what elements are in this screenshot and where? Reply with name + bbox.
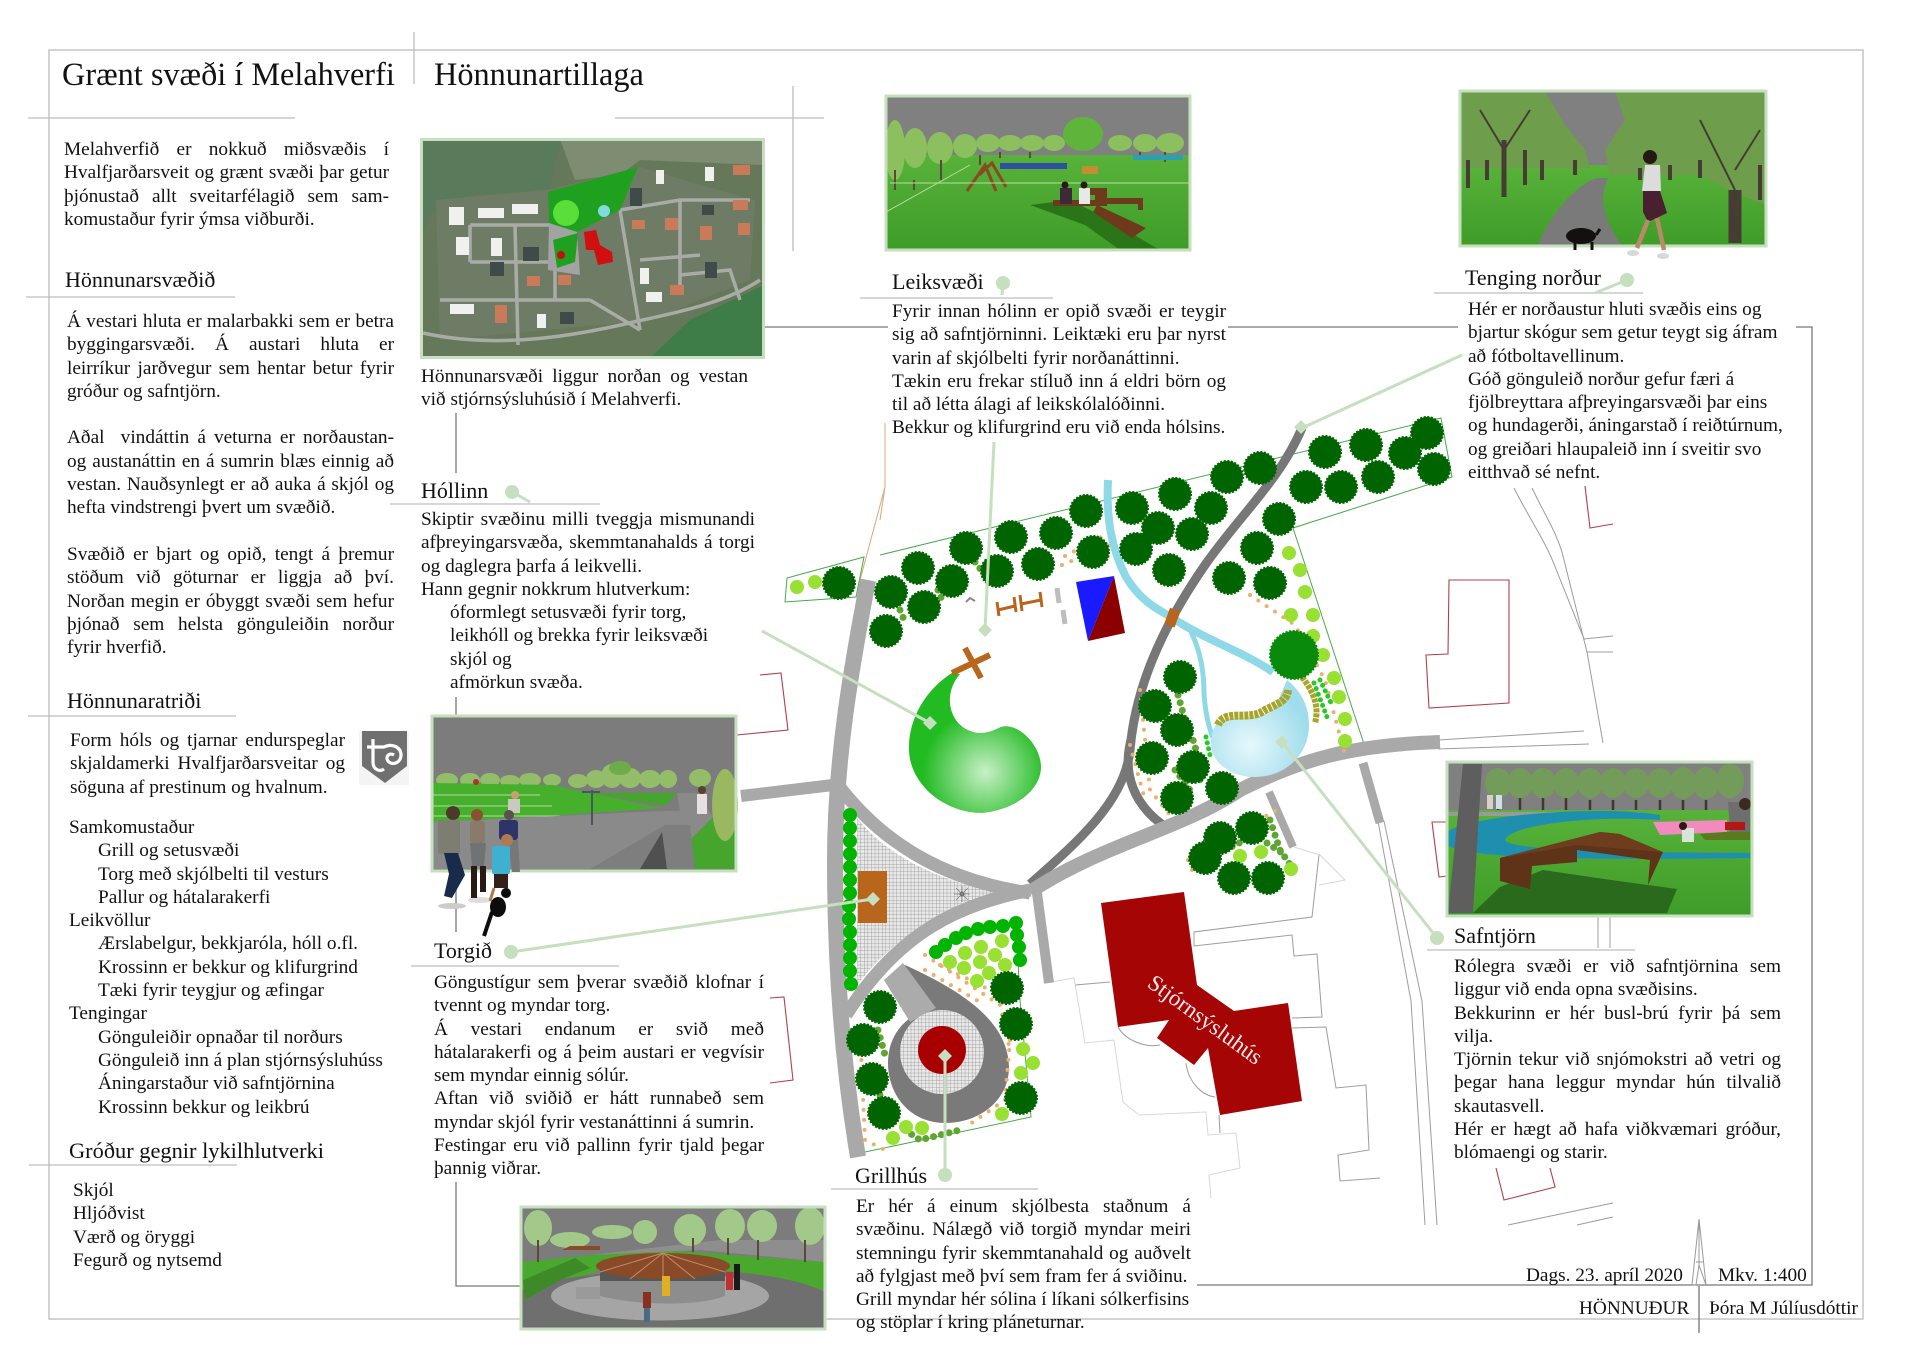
walker and dog — [1566, 150, 1669, 259]
walking paths — [1030, 428, 1302, 884]
heading: grill house: Grillhús — [855, 1163, 927, 1188]
pond — [1211, 680, 1309, 777]
text block: grill house — [856, 1196, 1191, 1333]
text block: design features: söguna af prestinum og hvalnum. — [70, 777, 328, 798]
text block: design features: skjaldamerki Hvalfjarðarsveitar og — [70, 753, 345, 774]
grey roads — [741, 580, 1440, 1157]
text block: north link: og hundagerði, áningarstað í reiðtúrnum, — [1468, 415, 1783, 436]
orange flower dots — [860, 535, 1345, 1150]
bridge — [1164, 608, 1180, 628]
people in the plaza render — [438, 779, 707, 936]
grill loop path — [885, 965, 1009, 1123]
text block: the hill: Skiptir svæðinu milli tveggja mismunandi — [421, 509, 755, 530]
hill — [909, 673, 1041, 813]
text block: pond: Rólegra svæði er við safntjörnina sem — [1454, 956, 1781, 977]
heading: north link: Tenging norður — [1465, 265, 1601, 290]
text block: grill house: að fylgjast með því sem fram fer á sviðinu. — [856, 1266, 1187, 1287]
plaza paving — [857, 818, 1005, 985]
text block: pond: Tjörnin tekur við snjómokstri að vetri og — [1454, 1049, 1781, 1070]
icon: municipal shield — [359, 731, 409, 785]
heading: play area: Leiksvæði — [892, 269, 984, 294]
aerial photo — [421, 139, 764, 358]
text block: pond: vilja. — [1454, 1026, 1493, 1047]
render: plaza view — [432, 716, 738, 936]
text block: the square: Aftan við sviðið er hátt runnabeð sem — [434, 1088, 764, 1109]
text block: play area: Tækin eru frekar stíluð inn á eldri börn og — [892, 371, 1226, 392]
list: vegetation: Værð og öryggi — [73, 1227, 195, 1248]
text block: the hill: afþreyingarsvæða, skemmtanahalds á torgi — [421, 532, 755, 553]
sun-dial star — [954, 886, 970, 902]
scale: Mkv. 1:400 — [1718, 1265, 1807, 1286]
text block: play area: Fyrir innan hólinn er opið svæði er teygir — [892, 301, 1226, 322]
heading: the square: Torgið — [434, 938, 492, 963]
text block: the hill: Hann gegnir nokkrum hlutverkum: — [421, 579, 690, 600]
text block: design area: vestan. Nauðsynlegt er að auka á skjól og — [67, 474, 394, 495]
text block: play area — [892, 301, 1226, 438]
text block: design area: stöðum við göturnar er liggja að því. — [67, 567, 394, 588]
designer name: Þóra M Júlíusdóttir — [1709, 1298, 1858, 1319]
park boundary — [785, 418, 1452, 1152]
municipal building — [1101, 892, 1302, 1115]
heading: design features: Hönnunaratriði — [67, 688, 201, 713]
text block: intro: Hvalfjarðarsveit og grænt svæði þar getur — [64, 162, 389, 183]
text block: design features — [70, 730, 345, 798]
text block: design area — [67, 310, 394, 658]
light green shrubs — [790, 546, 1352, 1145]
list: features: Leikvöllur — [69, 910, 150, 931]
render: grill house — [521, 1207, 825, 1329]
text block: the square: Göngustígur sem þverar svæðið klofnar í — [434, 972, 764, 993]
text block: the square: hátalarakerfi og á þeim austari er vegvísir — [434, 1042, 764, 1063]
text block: intro: komustaður fyrir ýmsa viðburði. — [64, 209, 315, 230]
list: features: Pallur og hátalarakerfi — [98, 887, 270, 908]
building label: Stjórnsýsluhús — [1143, 970, 1267, 1070]
text block: design area: fyrir hverfið. — [67, 637, 167, 658]
list: vegetation: Hljóðvist — [73, 1203, 145, 1224]
render: path north — [1460, 91, 1766, 259]
text block: design area: leirríkur jarðvegur sem hentar betur fyrir — [67, 358, 394, 379]
text block: grill house: Er hér á einum skjólbesta staðnum á — [856, 1196, 1191, 1217]
text block: pond — [1454, 956, 1781, 1163]
list: features: Áningarstaður við safntjörnina — [98, 1073, 335, 1094]
heading: design area: Hönnunarsvæðið — [65, 267, 215, 292]
text block: the hill: og daglegra þarfa á leikvelli. — [421, 556, 642, 577]
text block: design area: gróður og safntjörn. — [67, 381, 221, 402]
text block: the square: sem myndar einnig sólúr. — [434, 1065, 629, 1086]
text block: design features: Form hóls og tjarnar endurspeglar — [70, 730, 345, 751]
text block: design area: hefta vindstrengi þvert um svæðið. — [67, 497, 335, 518]
text block: north link: fjölbreyttara afþreyingarsvæði þar eins — [1468, 392, 1767, 413]
caption: aerial photo: við stjórnsýsluhúsið í Melahverfi. — [421, 389, 681, 410]
text block: the hill — [421, 509, 755, 693]
list: features: Ærslabelgur, bekkjaróla, hóll o.fl. — [98, 933, 358, 954]
text block: pond: liggur við enda opna svæðisins. — [1454, 979, 1698, 1000]
trees — [823, 417, 1450, 1129]
text block: design area: þjónað sem helsta gönguleiðin norður — [67, 614, 394, 635]
list: features: Gönguleiðir opnaðar til norðurs — [98, 1027, 343, 1048]
reeds — [1218, 677, 1317, 725]
text block: grill house: Grill myndar hér sólina í líkani sólkerfisins — [856, 1289, 1189, 1310]
list: features: Grill og setusvæði — [98, 840, 239, 861]
text block: the square: Á vestari endanum er svið með — [434, 1019, 764, 1040]
text block: the square: myndar skjól fyrir vestanáttinni á sumrin. — [434, 1112, 754, 1133]
date: Dags. 23. apríl 2020 — [1526, 1265, 1683, 1286]
text block: intro: þjónustað allt sveitarfélagið sem sam- — [64, 186, 389, 207]
caption: aerial photo: Hönnunarsvæði liggur norðan og vestan — [421, 366, 748, 387]
text block: pond: Bekkurinn er hér busl-brú fyrir þá sem — [1454, 1003, 1781, 1024]
list: features: Tengingar — [69, 1003, 147, 1024]
large tree by pond — [1270, 631, 1318, 679]
text block: the square — [434, 972, 764, 1179]
text block: design area: Svæðið er bjart og opið, tengt á þremur — [67, 544, 394, 565]
list: features: Tæki fyrir teygjur og æfingar — [98, 980, 324, 1001]
text block: intro — [64, 139, 389, 230]
text block: north link — [1468, 299, 1783, 483]
heading: vegetation: Gróður gegnir lykilhlutverki — [69, 1138, 324, 1163]
text block: pond: blómaengi og starir. — [1454, 1142, 1608, 1163]
text block: the hill: afmörkun svæða. — [450, 672, 583, 693]
list: features: Krossinn er bekkur og klifurgrind — [98, 957, 358, 978]
text block: play area: Bekkur og klifurgrind eru við enda hólsins. — [892, 417, 1225, 438]
list: features: Krossinn bekkur og leikbrú — [98, 1097, 310, 1118]
list: features: Gönguleið inn á plan stjórnsýsluhúss — [98, 1050, 383, 1071]
text block: design area: Á vestari hluta er malarbakki sem er betra — [67, 311, 394, 332]
text block: the hill: skjól og — [450, 649, 512, 670]
heading: pond: Safntjörn — [1454, 923, 1536, 948]
title: Grænt svæði í Melahverfi — [62, 56, 395, 92]
render: pond — [1447, 762, 1752, 916]
text block: north link: Góð gönguleið norður gefur færi á — [1468, 369, 1734, 390]
list: vegetation — [73, 1180, 222, 1271]
text block: the hill: leikhóll og brekka fyrir leiksvæði — [450, 625, 708, 646]
text block: grill house: stemningu fyrir skemmtanahald og auðvelt — [856, 1243, 1191, 1264]
text block: the hill: óformlegt setusvæði fyrir torg, — [450, 602, 686, 623]
text block: play area: til að létta álagi af leikskólalóðinni. — [892, 394, 1165, 415]
text block: north link: og greiðari hlaupaleið inn í sveitir svo — [1468, 439, 1761, 460]
stream — [1108, 480, 1273, 738]
text block: north link: bjartur skógur sem getur teygt sig áfram — [1468, 322, 1778, 343]
text block: the square: tvennt og myndar torg. — [434, 995, 610, 1016]
existing buildings and street outlines — [737, 423, 1613, 1225]
play equipment — [997, 592, 1042, 616]
text block: the square: þannig viðrar. — [434, 1158, 541, 1179]
text block: design area: Norðan megin er óbyggt svæði sem hefur — [67, 591, 394, 612]
text block: grill house: svæðinu. Nálægð við torgið myndar meiri — [856, 1219, 1191, 1240]
text block: pond: Hér er hægt að hafa viðkvæmari gróður, — [1454, 1119, 1781, 1140]
text block: north link: eitthvað sé nefnt. — [1468, 462, 1600, 483]
heading: the hill: Hóllinn — [421, 478, 488, 503]
heading: design proposal: Hönnunartillaga — [434, 56, 644, 92]
cross bench — [952, 648, 990, 678]
caption: aerial photo — [421, 366, 748, 410]
text block: pond: skautasvell. — [1454, 1096, 1544, 1117]
callout lines and markers — [504, 273, 1634, 1182]
small green shrubs — [878, 562, 1295, 1140]
text block: play area: sig að safntjörninni. Leiktæki eru þar nyrst — [892, 324, 1226, 345]
list: features: Torg með skjólbelti til vesturs — [98, 864, 329, 885]
north arrow — [1692, 1219, 1706, 1285]
designer label: HÖNNUÐUR — [1579, 1298, 1689, 1319]
site plan — [741, 417, 1452, 1157]
render: playground — [885, 96, 1190, 250]
grill circle — [900, 1010, 984, 1094]
text block: grill house: og stöplar í kring pláneturnar. — [856, 1312, 1085, 1333]
text block: design area: byggingarsvæði. Á austari hluta er — [67, 334, 394, 355]
text block: intro: Melahverfið er nokkuð miðsvæðis í — [64, 139, 389, 160]
text block: the square: Festingar eru við pallinn fyrir tjald þegar — [434, 1135, 764, 1156]
text block: pond: þegar hana leggur myndar hún tilvalið — [1454, 1072, 1781, 1093]
list: features: Samkomustaður — [69, 817, 194, 838]
wood deck — [858, 871, 887, 923]
list: vegetation: Fegurð og nytsemd — [73, 1250, 222, 1271]
bright green hedge — [842, 808, 1027, 991]
swing — [1076, 576, 1125, 641]
text block: design area: og austanáttin en á sumrin blæs einnig að — [67, 451, 394, 472]
text block: north link: að fótboltavellinum. — [1468, 346, 1624, 367]
text block: north link: Hér er norðaustur hluti svæðis eins og — [1468, 299, 1761, 320]
text block: design area: Aðal vindáttin á veturna er norðaustan- — [67, 427, 394, 448]
list: vegetation: Skjól — [73, 1180, 114, 1201]
list: features — [69, 817, 383, 1118]
text block: play area: varin af skjólbelti fyrir norðanáttinni. — [892, 348, 1180, 369]
